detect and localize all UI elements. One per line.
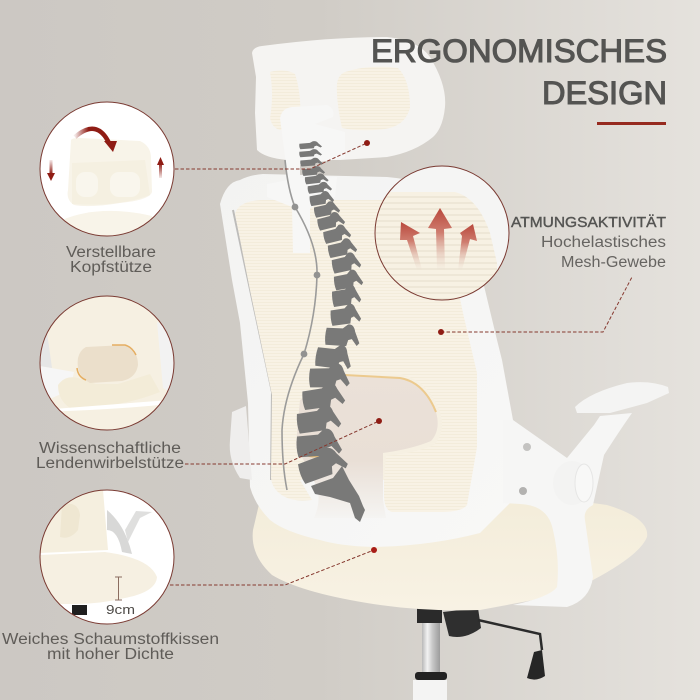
icon: up arrow bbox=[157, 157, 164, 178]
lumbar support bbox=[295, 372, 442, 518]
chair: arm bracket and armrest bbox=[503, 382, 669, 607]
headrest bbox=[252, 37, 445, 160]
frame inner shadow bbox=[233, 210, 272, 480]
text: adjustable headrest bbox=[66, 244, 156, 276]
text: adjustable headrest: Verstellbare bbox=[66, 244, 156, 261]
callout line: headrest bbox=[175, 140, 370, 169]
title underline bbox=[597, 122, 666, 125]
callout line: lumbar bbox=[185, 418, 382, 464]
frame side knob bbox=[230, 406, 252, 480]
callout line: mesh bbox=[438, 277, 632, 335]
circle: lumbar support bbox=[38, 296, 175, 430]
icon: airflow arrows bbox=[400, 208, 477, 270]
text: lumbar support bbox=[36, 440, 184, 472]
title: ERGONOMISCHES bbox=[371, 33, 667, 69]
title: DESIGN bbox=[542, 75, 667, 111]
chair: seat cushion bbox=[253, 490, 647, 610]
text: seat cushion: mit hoher Dichte bbox=[47, 646, 174, 663]
text: breathability bbox=[511, 214, 666, 271]
text: seat cushion bbox=[2, 631, 219, 663]
chair: backrest frame bbox=[220, 174, 513, 547]
spine illustration bbox=[282, 141, 365, 522]
callout line: seat bbox=[170, 547, 377, 585]
measure mark bbox=[115, 577, 122, 600]
text: adjustable headrest: Kopfstütze bbox=[70, 259, 152, 276]
label: 9cm: 9cm bbox=[106, 602, 135, 617]
neck bracket bbox=[267, 105, 345, 253]
circle: breathable mesh bbox=[370, 166, 509, 310]
circle: seat cushion bbox=[40, 490, 174, 624]
text: lumbar support: Lendenwirbelstütze bbox=[36, 455, 184, 472]
chair: gas lift and lever bbox=[413, 608, 545, 700]
nerve line bbox=[282, 160, 317, 490]
text: breathability: Mesh-Gewebe bbox=[561, 254, 666, 271]
text: seat cushion: Weiches Schaumstoffkissen bbox=[2, 631, 219, 648]
text: breathability: ATMUNGSAKTIVITÄT bbox=[511, 214, 666, 231]
circle: adjustable headrest bbox=[40, 102, 174, 240]
icon: curved arrow bbox=[75, 129, 117, 152]
backrest mesh bbox=[235, 200, 477, 512]
icon: down arrow bbox=[47, 160, 55, 181]
title bbox=[371, 33, 667, 111]
text: lumbar support: Wissenschaftliche bbox=[39, 440, 181, 457]
text: breathability: Hochelastisches bbox=[541, 234, 666, 251]
